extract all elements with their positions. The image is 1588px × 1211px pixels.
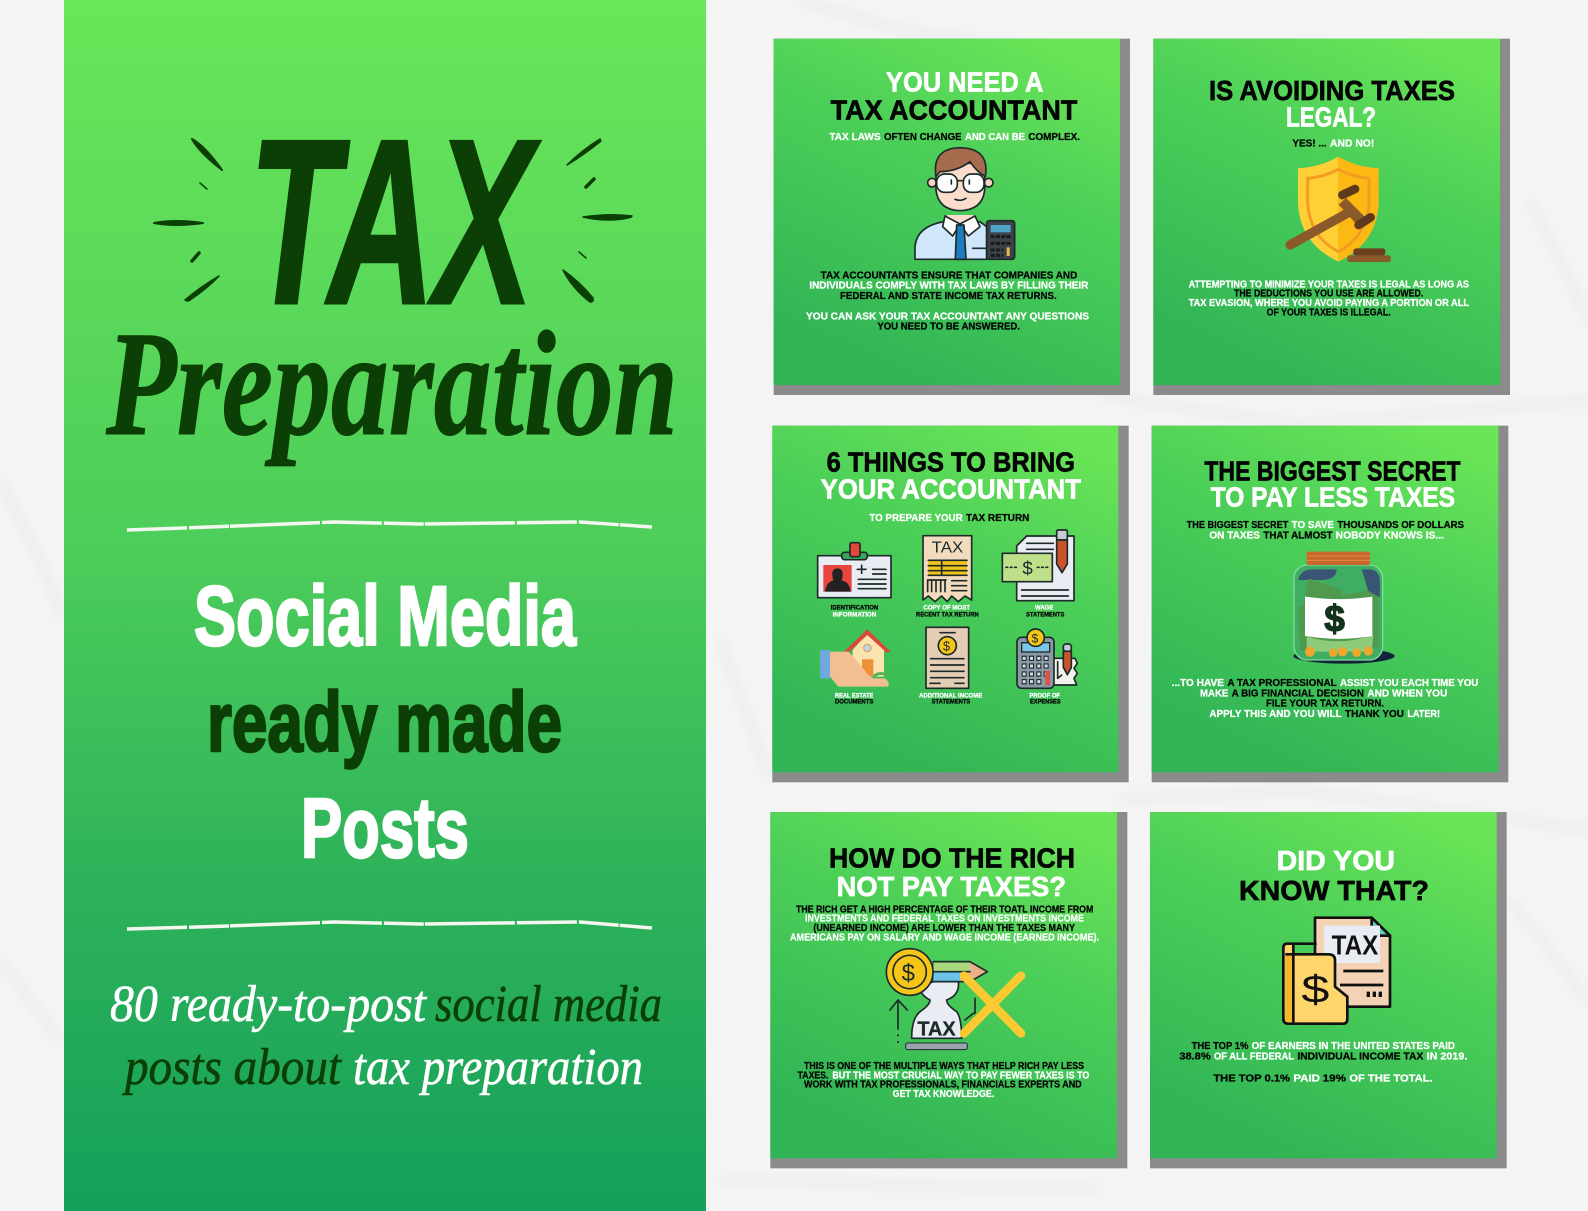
subheading: AND NO!	[1330, 139, 1374, 150]
card background	[1152, 426, 1498, 772]
body text: YOU NEED TO BE ANSWERED.	[877, 321, 1020, 332]
icon: tax pillar with crossed mark	[886, 949, 1021, 1050]
labels row 2: EXPENSES	[1030, 699, 1061, 706]
labels row 2	[835, 692, 1061, 706]
card shadow	[772, 426, 1129, 782]
panel: you need a tax accountant	[774, 39, 1130, 395]
closing text: A TAX PROFESSIONAL	[1227, 678, 1337, 689]
subtitle script text: posts about	[121, 1039, 342, 1096]
icon: calculator and receipt	[1017, 629, 1077, 688]
heading: YOUR ACCOUNTANT	[821, 473, 1081, 504]
heading: LEGAL?	[1286, 102, 1376, 133]
icon: additional income statement: $	[943, 640, 950, 654]
card shadow	[1152, 426, 1508, 782]
heading: IS AVOIDING TAXES	[1209, 75, 1455, 106]
closing text: THANK YOU	[1345, 709, 1404, 720]
subtitle script text: 80 ready-to-post	[110, 976, 427, 1033]
closing text	[798, 1061, 1090, 1100]
closing text: ...TO HAVE	[1172, 678, 1224, 689]
card shadow	[774, 39, 1130, 395]
body text: FEDERAL AND STATE INCOME TAX RETURNS.	[840, 291, 1057, 302]
heading: 6 THINGS TO BRING	[827, 447, 1075, 478]
labels row 1: RECENT TAX RETURN	[916, 611, 979, 618]
closing text: APPLY THIS AND YOU WILL	[1209, 709, 1342, 720]
labels row 1: WAGE	[1035, 605, 1053, 612]
icon: money jar: $	[1324, 598, 1345, 639]
subheading	[829, 132, 1080, 143]
heading: Social Media: Social Media	[194, 569, 577, 663]
cover background	[64, 0, 706, 1211]
icon: wage statement with pencil: $	[1022, 558, 1033, 579]
labels row 2: PROOF OF	[1029, 692, 1060, 699]
heading: ready made: ready made	[207, 675, 562, 769]
labels row 1: STATEMENTS	[1026, 611, 1064, 618]
icon: tax document and folder	[1283, 918, 1390, 1024]
closing text: BUT THE MOST CRUCIAL WAY TO PAY FEWER TAXES IS TO	[832, 1070, 1090, 1081]
intro text: (UNEARNED INCOME) ARE LOWER THAN THE TAXES MANY	[813, 923, 1076, 934]
icon: tax pillar with crossed mark: $	[902, 960, 915, 987]
panel: 6 things to bring your accountant	[772, 426, 1129, 782]
subheading: TAX LAWS	[829, 132, 881, 143]
title: Preparation: Preparation	[105, 301, 678, 467]
labels row 1: IDENTIFICATION	[831, 605, 879, 612]
card background	[1150, 812, 1497, 1158]
subheading: YES! ...	[1292, 139, 1327, 150]
divider: upper chalk line	[127, 522, 652, 530]
body text: OF YOUR TAXES IS ILLEGAL.	[1267, 307, 1391, 318]
statistics text: INDIVIDUAL INCOME TAX	[1297, 1052, 1423, 1063]
closing text: WORK WITH TAX PROFESSIONALS, FINANCIALS EXPERTS AND	[804, 1080, 1082, 1091]
heading: NOT PAY TAXES?	[837, 871, 1066, 902]
icon: tax pillar with crossed mark: TAX	[917, 1018, 956, 1041]
card background	[770, 812, 1117, 1158]
card background	[772, 426, 1118, 772]
icon: tax return receipt: TAX	[932, 540, 964, 557]
intro text: THOUSANDS OF DOLLARS	[1337, 520, 1464, 531]
body text: INDIVIDUALS COMPLY WITH TAX LAWS BY FILLING THEIR	[809, 281, 1089, 292]
subheading	[869, 513, 1029, 524]
statistics text: 19%	[1323, 1074, 1346, 1085]
body text: YOU CAN ASK YOUR TAX ACCOUNTANT ANY QUESTIONS	[806, 311, 1089, 322]
statistics text: THE TOP 0.1%	[1213, 1074, 1290, 1085]
closing text: LATER!	[1407, 709, 1440, 720]
closing text: FILE YOUR TAX RETURN.	[1266, 699, 1384, 710]
icon: tax return receipt	[923, 536, 972, 602]
panel: biggest secret to pay less taxes	[1152, 426, 1508, 782]
panel: left cover	[64, 0, 706, 1211]
body text: TAX ACCOUNTANTS ENSURE THAT COMPANIES AND	[821, 270, 1078, 281]
labels row 2: REAL ESTATE	[835, 692, 873, 699]
panel: did you know that	[1150, 812, 1507, 1168]
heading: HOW DO THE RICH	[829, 843, 1075, 874]
card shadow	[770, 812, 1127, 1168]
card shadow	[1150, 812, 1507, 1168]
statistics text: PAID	[1293, 1074, 1321, 1085]
divider: lower chalk line	[127, 922, 652, 929]
closing text: TAXES.	[798, 1070, 829, 1081]
labels row 2: DOCUMENTS	[835, 699, 873, 706]
statistics text	[1179, 1041, 1467, 1085]
card background	[1153, 39, 1500, 385]
body text: TAX EVASION, WHERE YOU AVOID PAYING A PORTION OR ALL	[1189, 298, 1469, 309]
intro text: THAT ALMOST	[1263, 530, 1333, 541]
intro text	[790, 904, 1099, 943]
subheading	[1292, 139, 1374, 150]
closing text: AND WHEN YOU	[1367, 688, 1447, 699]
icon: additional income statement	[926, 627, 969, 688]
heading: Posts: Posts	[301, 781, 469, 875]
heading	[1209, 75, 1455, 133]
closing text: ASSIST YOU EACH TIME YOU	[1340, 678, 1478, 689]
icon: wage statement with pencil	[1002, 530, 1074, 601]
icon: tax document and folder: $	[1301, 967, 1329, 1011]
statistics text: 38.8%	[1179, 1052, 1211, 1063]
icon: money jar	[1293, 552, 1395, 664]
heading: YOU NEED A	[886, 67, 1043, 98]
card background	[774, 39, 1120, 385]
heading	[829, 843, 1075, 902]
intro text: THE BIGGEST SECRET	[1187, 520, 1289, 531]
icon: accountant with phone	[915, 148, 1015, 259]
intro text: AMERICANS PAY ON SALARY AND WAGE INCOME (EARNED INCOME).	[790, 932, 1099, 943]
panel: how do the rich not pay taxes	[770, 812, 1127, 1168]
closing text: MAKE	[1200, 688, 1228, 699]
heading: TAX ACCOUNTANT	[831, 94, 1077, 125]
heading	[1239, 845, 1429, 906]
icon: calculator and receipt: $	[1032, 631, 1039, 645]
body text: ATTEMPTING TO MINIMIZE YOUR TAXES IS LEGAL AS LONG AS	[1189, 279, 1470, 290]
icon: shield and gavel	[1290, 157, 1391, 262]
heading: DID YOU	[1277, 845, 1395, 876]
icon: tax document and folder: TAX	[1332, 930, 1378, 961]
subheading: COMPLEX.	[1028, 132, 1080, 143]
labels row 1: INFORMATION	[833, 611, 877, 618]
labels row 1: COPY OF MOST	[923, 605, 970, 612]
heading	[831, 67, 1077, 125]
intro text: INVESTMENTS AND FEDERAL TAXES ON INVESTMENTS INCOME	[805, 914, 1084, 925]
panel: is avoiding taxes legal	[1153, 39, 1510, 395]
statistics text: THE TOP 1%	[1192, 1041, 1248, 1052]
labels row 2: ADDITIONAL INCOME	[919, 692, 982, 699]
intro text: ON TAXES	[1209, 530, 1260, 541]
heading: TO PAY LESS TAXES	[1211, 482, 1455, 513]
title: TAX: TAX	[249, 90, 541, 353]
intro text: TO SAVE	[1292, 520, 1334, 531]
subheading: AND CAN BE	[965, 132, 1025, 143]
statistics text: IN 2019.	[1427, 1052, 1467, 1063]
icon: hand holding house	[820, 629, 891, 687]
closing text	[1172, 678, 1478, 720]
body text: THE DEDUCTIONS YOU USE ARE ALLOWED.	[1234, 289, 1424, 300]
intro text: NOBODY KNOWS IS...	[1336, 530, 1444, 541]
subtitle script text: social media	[435, 976, 662, 1033]
icon: identification card	[818, 543, 891, 598]
closing text: A BIG FINANCIAL DECISION	[1232, 688, 1364, 699]
intro text: THE RICH GET A HIGH PERCENTAGE OF THEIR TOATL INCOME FROM	[796, 904, 1093, 915]
heading: KNOW THAT?	[1239, 875, 1429, 906]
statistics text: OF EARNERS IN THE UNITED STATES PAID	[1252, 1041, 1456, 1052]
closing text: THIS IS ONE OF THE MULTIPLE WAYS THAT HELP RICH PAY LESS	[804, 1061, 1085, 1072]
subheading: TO PREPARE YOUR	[869, 513, 963, 524]
subtitle script text: tax preparation	[353, 1039, 643, 1096]
body text	[806, 270, 1089, 332]
body text	[1189, 279, 1470, 318]
subtitle script text	[110, 976, 662, 1096]
heading	[821, 447, 1081, 504]
labels row 2: STATEMENTS	[932, 699, 970, 706]
heading	[1204, 456, 1461, 513]
card shadow	[1153, 39, 1510, 395]
heading: THE BIGGEST SECRET	[1204, 456, 1461, 487]
icon: burst strokes around TAX	[154, 139, 632, 302]
closing text: GET TAX KNOWLEDGE.	[893, 1089, 995, 1100]
statistics text: OF ALL FEDERAL	[1214, 1052, 1294, 1063]
subheading: OFTEN CHANGE	[884, 132, 962, 143]
subheading: TAX RETURN	[966, 513, 1029, 524]
statistics text: OF THE TOTAL.	[1349, 1074, 1433, 1085]
labels row 1	[831, 605, 1064, 618]
intro text	[1187, 520, 1464, 541]
